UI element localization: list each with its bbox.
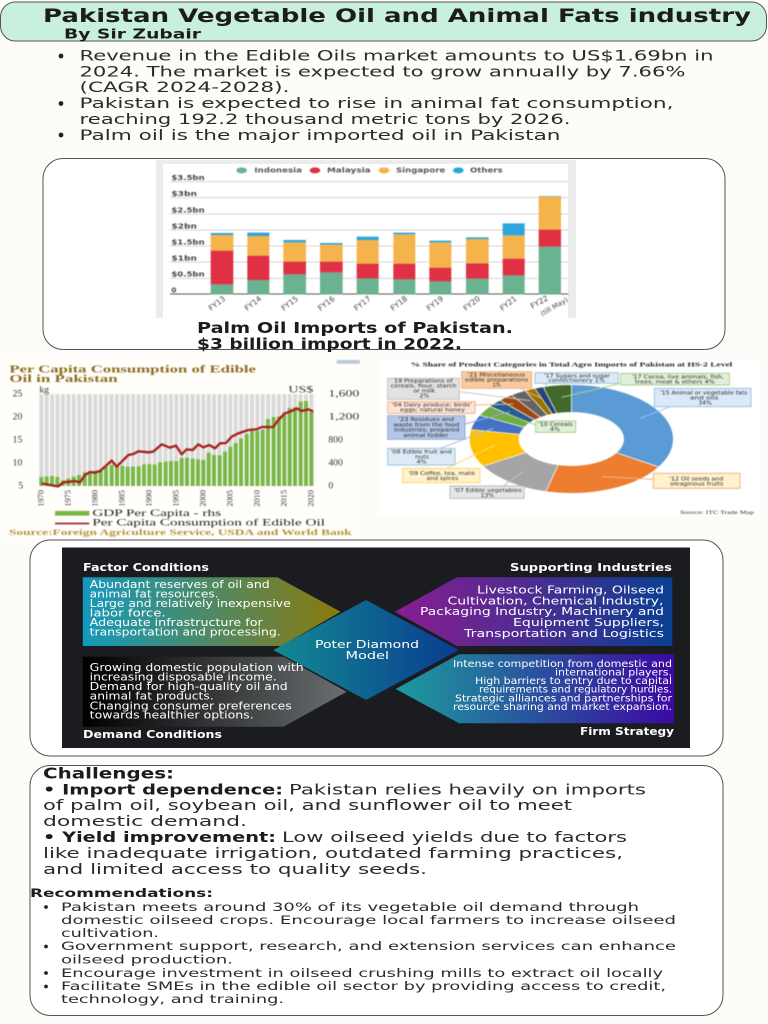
challenges heading: Challenges: bbox=[43, 764, 174, 782]
label: fruit and nuts bbox=[388, 448, 455, 465]
y axis labels: $3.5bn bbox=[171, 174, 205, 182]
label: oil seeds: oleaginous fruits bbox=[670, 481, 724, 487]
leader lines bbox=[440, 383, 670, 486]
callout labels bbox=[388, 372, 751, 499]
label: cocoa and others: trees, meat & others 4% bbox=[635, 380, 715, 386]
supporting industries block bbox=[395, 562, 672, 646]
label: residues: industries; prepared bbox=[394, 428, 459, 434]
legend: Per Capita Consumption of Edible Oil bbox=[92, 518, 326, 528]
chart title bbox=[9, 364, 257, 385]
label: animal or vegetable fats: and oils bbox=[690, 395, 719, 401]
factor conditions block: animal fat resources. bbox=[90, 588, 219, 600]
y axis labels: 0 bbox=[171, 286, 176, 294]
supporting industries block: Transportation and Logistics bbox=[463, 627, 664, 640]
y axis labels: $1.5bn bbox=[171, 238, 205, 246]
firm strategy text: international players. bbox=[555, 668, 672, 679]
chart caption bbox=[197, 319, 513, 353]
legend: GDP Per Capita - rhs bbox=[92, 508, 222, 518]
series: Malaysia bbox=[211, 230, 561, 284]
firm strategy text: requirements and regulatory hurdles. bbox=[479, 685, 672, 696]
chart caption: Palm Oil Imports of Pakistan. bbox=[197, 319, 513, 337]
factor conditions block: Adequate infrastructure for bbox=[90, 617, 264, 629]
consumption line bbox=[42, 408, 313, 486]
left axis labels: 10 bbox=[13, 458, 22, 469]
background bars bbox=[39, 302, 315, 577]
supporting industries block: Supporting Industries bbox=[510, 562, 672, 574]
recommendations list: oilseed production. bbox=[61, 952, 233, 966]
label: residues: '23 Residues and bbox=[398, 417, 454, 423]
legend bbox=[55, 508, 326, 528]
challenges text: domestic demand. bbox=[43, 814, 247, 830]
demand conditions block: Demand Conditions bbox=[83, 729, 222, 741]
header banner bbox=[0, 2, 766, 42]
series: Indonesia bbox=[211, 247, 561, 294]
label: fruit and nuts: nuts bbox=[415, 454, 429, 460]
right axis labels: 800 bbox=[328, 435, 343, 446]
challenges text bbox=[43, 782, 646, 878]
left axis labels bbox=[13, 384, 314, 492]
label: residues: animal fodder bbox=[403, 433, 449, 439]
year labels: 1975 bbox=[64, 490, 73, 507]
chart title: Oil in Pakistan bbox=[9, 374, 118, 385]
center diamond: Poter Diamond bbox=[315, 638, 419, 651]
challenges text: Low oilseed yields due to factors bbox=[282, 830, 627, 846]
intro bullet list: Pakistan is expected to rise in animal fat consumption, bbox=[80, 96, 674, 112]
demand conditions text: increasing disposable income. bbox=[90, 672, 277, 684]
label: fruit and nuts: '08 Edible fruit and bbox=[391, 450, 452, 456]
label: cereals: 4% bbox=[550, 427, 560, 433]
y axis labels: $3bn bbox=[171, 190, 197, 198]
label: cocoa and others bbox=[621, 373, 729, 386]
demand conditions text: Growing domestic population with bbox=[90, 662, 304, 674]
center diamond bbox=[273, 600, 459, 700]
demand conditions text: animal fat products. bbox=[90, 691, 214, 703]
left axis labels: 20 bbox=[13, 412, 22, 423]
challenges text: • Import dependence: bbox=[43, 782, 283, 798]
demand conditions block bbox=[83, 657, 347, 741]
challenges text: and limited access to quality seeds. bbox=[43, 862, 427, 878]
label: sugars: '17 Sugars and sugar bbox=[544, 373, 611, 379]
right axis labels: 400 bbox=[328, 458, 343, 469]
label: coffee and spices bbox=[403, 468, 480, 483]
x axis labels: FY21 bbox=[498, 294, 519, 313]
factor conditions block: Abundant reserves of oil and bbox=[90, 579, 270, 591]
label: miscellaneous: edible preparations bbox=[465, 377, 529, 383]
legend: Indonesia bbox=[254, 166, 302, 174]
right axis labels: 1,200 bbox=[328, 412, 360, 423]
recommendations list: Pakistan meets around 30% of its vegetable oil demand through bbox=[61, 900, 639, 914]
intro bullet list bbox=[59, 48, 714, 144]
factor conditions block: labor force. bbox=[90, 608, 166, 620]
firm strategy text: Strategic alliances and partnerships for bbox=[455, 693, 672, 704]
supporting industries block: Equipment Suppliers, bbox=[513, 616, 664, 629]
intro bullet list: (CAGR 2024-2028). bbox=[80, 80, 290, 96]
year labels: 1985 bbox=[118, 490, 127, 507]
label: preparations of cereals: 2% bbox=[419, 394, 429, 400]
label: animal or vegetable fats bbox=[654, 388, 751, 407]
label: preparations of cereals: or milk bbox=[413, 389, 435, 395]
right axis labels bbox=[328, 389, 360, 492]
label: oil seeds: '12 Oil seeds and bbox=[669, 476, 723, 482]
intro bullet list: Revenue in the Edible Oils market amounts to US$1.69bn in bbox=[80, 48, 714, 64]
x axis labels: FY16 bbox=[316, 294, 337, 313]
recommendations list: Encourage investment in oilseed crushing mills to extract oil locally bbox=[61, 966, 663, 980]
chart caption: $3 billion import in 2022. bbox=[197, 335, 462, 353]
title: Pakistan Vegetable Oil and Animal Fats industry bbox=[43, 5, 752, 27]
label: cereals bbox=[536, 421, 576, 433]
supporting industries block: Packaging Industry, Machinery and bbox=[420, 605, 664, 618]
label: sugars bbox=[535, 373, 618, 384]
year labels: 1990 bbox=[145, 490, 154, 507]
donut slices bbox=[469, 385, 673, 493]
year labels bbox=[36, 490, 316, 507]
panel: agro imports donut chart bbox=[378, 360, 760, 516]
label: fruit and nuts: 4% bbox=[417, 459, 427, 465]
right axis labels: 1,600 bbox=[328, 389, 360, 400]
year labels: 2010 bbox=[253, 490, 262, 507]
intro bullet list: 2024. The market is expected to grow annually by 7.66% bbox=[80, 64, 686, 80]
year labels: 2005 bbox=[226, 490, 235, 507]
recommendations list: Facilitate SMEs in the edible oil sector by providing access to credit, bbox=[61, 979, 666, 993]
factor conditions block: transportation and processing. bbox=[90, 627, 281, 639]
left axis labels: 5 bbox=[18, 481, 23, 492]
stacked bar chart bbox=[170, 166, 570, 318]
year labels: 1970 bbox=[36, 490, 45, 507]
label: dairy bbox=[388, 402, 475, 413]
left axis labels: 15 bbox=[13, 435, 22, 446]
legend: Malaysia bbox=[327, 166, 371, 174]
GDP per capita bars bbox=[41, 401, 311, 486]
demand conditions text: Demand for high-quality oil and bbox=[90, 681, 288, 693]
year labels: 1995 bbox=[172, 490, 181, 507]
label: edible vegetables bbox=[450, 486, 524, 499]
center diamond: Model bbox=[346, 649, 389, 662]
label: residues: waste from the food bbox=[393, 422, 459, 428]
label: coffee and spices: and spices bbox=[427, 476, 459, 482]
firm strategy text: resource sharing and market expansion. bbox=[453, 702, 672, 713]
x axis labels: FY20 bbox=[462, 294, 482, 313]
left axis labels: 25 bbox=[13, 389, 22, 400]
label: preparations of cereals: 19 Preparations of bbox=[394, 379, 453, 385]
demand conditions text: towards healthier options. bbox=[90, 710, 254, 722]
chart title: Per Capita Consumption of Edible bbox=[9, 364, 257, 375]
x axis labels: FY15 bbox=[280, 294, 300, 313]
intro bullet list: Palm oil is the major imported oil in Pakistan bbox=[80, 128, 560, 144]
label: oil seeds bbox=[653, 473, 740, 488]
y axis labels: $0.5bn bbox=[171, 271, 205, 279]
series: Singapore bbox=[211, 196, 561, 268]
x axis labels: FY18 bbox=[389, 294, 409, 313]
challenges text: like inadequate irrigation, outdated farming practices, bbox=[43, 846, 623, 862]
y axis labels: $2bn bbox=[171, 222, 197, 230]
label: coffee and spices: '09 Coffee, tea, maté bbox=[408, 470, 475, 477]
demand conditions text: Changing consumer preferences bbox=[90, 700, 292, 712]
factor conditions block: Large and relatively inexpensive bbox=[90, 598, 291, 610]
factor conditions block: Factor Conditions bbox=[83, 562, 209, 574]
x axis labels: FY13 bbox=[207, 294, 227, 313]
recommendations heading: Recommendations: bbox=[30, 886, 213, 900]
x axis labels: FY22 bbox=[529, 294, 550, 311]
challenges text: Pakistan relies heavily on imports bbox=[289, 782, 646, 798]
label: cereals: '10 Cereals bbox=[538, 422, 573, 428]
left axis labels: US$ bbox=[288, 384, 314, 395]
chart title: % Share of Product Categories in Total Agro Imports of Pakistan at HS-2 Level bbox=[411, 363, 733, 369]
label: miscellaneous: '21 Miscellaneous bbox=[467, 372, 525, 378]
label: preparations of cereals: cereals, flour, starch bbox=[391, 384, 457, 390]
x axis labels: (till May) bbox=[539, 296, 570, 318]
intro bullet list: reaching 192.2 thousand metric tons by 2026. bbox=[80, 112, 570, 128]
recommendations list bbox=[44, 900, 676, 1006]
year labels: 2020 bbox=[307, 490, 316, 507]
x axis labels bbox=[207, 294, 570, 318]
demand conditions text bbox=[90, 662, 304, 722]
label: animal or vegetable fats: 34% bbox=[698, 400, 712, 406]
label: sugars: confectionery 1% bbox=[548, 378, 605, 384]
firm strategy text: High barriers to entry due to capital bbox=[475, 676, 672, 687]
label: edible vegetables: '07 Edible vegetables bbox=[454, 488, 522, 494]
left axis labels: kg bbox=[39, 384, 49, 395]
series: Others bbox=[211, 196, 561, 245]
byline: By Sir Zubair bbox=[64, 28, 202, 42]
panel: porter diamond model bbox=[30, 540, 723, 756]
recommendations list: technology, and training. bbox=[61, 992, 284, 1006]
challenges text: of palm oil, soybean oil, and sunflower oil to meet bbox=[43, 798, 572, 814]
recommendations list: Government support, research, and extension services can enhance bbox=[61, 939, 676, 953]
firm strategy text: Intense competition from domestic and bbox=[453, 659, 672, 670]
label: edible vegetables: 13% bbox=[481, 493, 494, 499]
right axis labels: 0 bbox=[328, 481, 333, 492]
y axis labels: $2.5bn bbox=[171, 206, 205, 214]
legend: Others bbox=[470, 166, 503, 174]
legend: Singapore bbox=[396, 166, 446, 174]
panel: per capita consumption chart bbox=[0, 358, 362, 538]
factor conditions block bbox=[83, 562, 341, 646]
panel: challenges and recommendations bbox=[30, 764, 723, 1016]
legend bbox=[236, 166, 503, 174]
supporting industries block: Livestock Farming, Oilseed bbox=[477, 584, 664, 596]
label: cocoa and others: '17 Cocoa, live animals, fish, bbox=[632, 374, 724, 380]
recommendations list: cultivation. bbox=[61, 926, 159, 940]
x axis labels: FY17 bbox=[352, 294, 373, 313]
year labels: 2000 bbox=[199, 490, 208, 507]
label: residues bbox=[388, 416, 465, 439]
label: dairy: eggs; natural honey bbox=[400, 407, 465, 413]
source note: Source: ITC Trade Map bbox=[680, 510, 754, 516]
panel: palm oil imports bbox=[43, 158, 725, 353]
firm strategy block bbox=[396, 654, 674, 738]
y axis labels: $1bn bbox=[171, 254, 197, 262]
recommendations list: domestic oilseed crops. Encourage local farmers to increase oilseed bbox=[61, 913, 676, 927]
supporting industries block: Cultivation, Chemical Industry, bbox=[448, 594, 664, 608]
source note: Source:Foreign Agriculture Service, USDA and World Bank bbox=[9, 528, 352, 537]
x axis labels: FY14 bbox=[243, 294, 263, 313]
label: dairy: '04 Dairy produce; birds' bbox=[392, 402, 472, 408]
label: preparations of cereals bbox=[388, 378, 459, 400]
label: miscellaneous bbox=[462, 372, 532, 388]
label: miscellaneous: 1% bbox=[492, 382, 501, 388]
year labels: 2015 bbox=[280, 490, 289, 507]
x axis labels: FY19 bbox=[425, 294, 445, 313]
label: animal or vegetable fats: '15 Animal or vegetable fats bbox=[660, 390, 748, 396]
firm strategy block: Firm Strategy bbox=[580, 726, 674, 738]
challenges text: • Yield improvement: bbox=[43, 830, 276, 846]
year labels: 1980 bbox=[91, 490, 100, 507]
y axis labels bbox=[171, 174, 205, 294]
firm strategy text bbox=[453, 659, 672, 713]
